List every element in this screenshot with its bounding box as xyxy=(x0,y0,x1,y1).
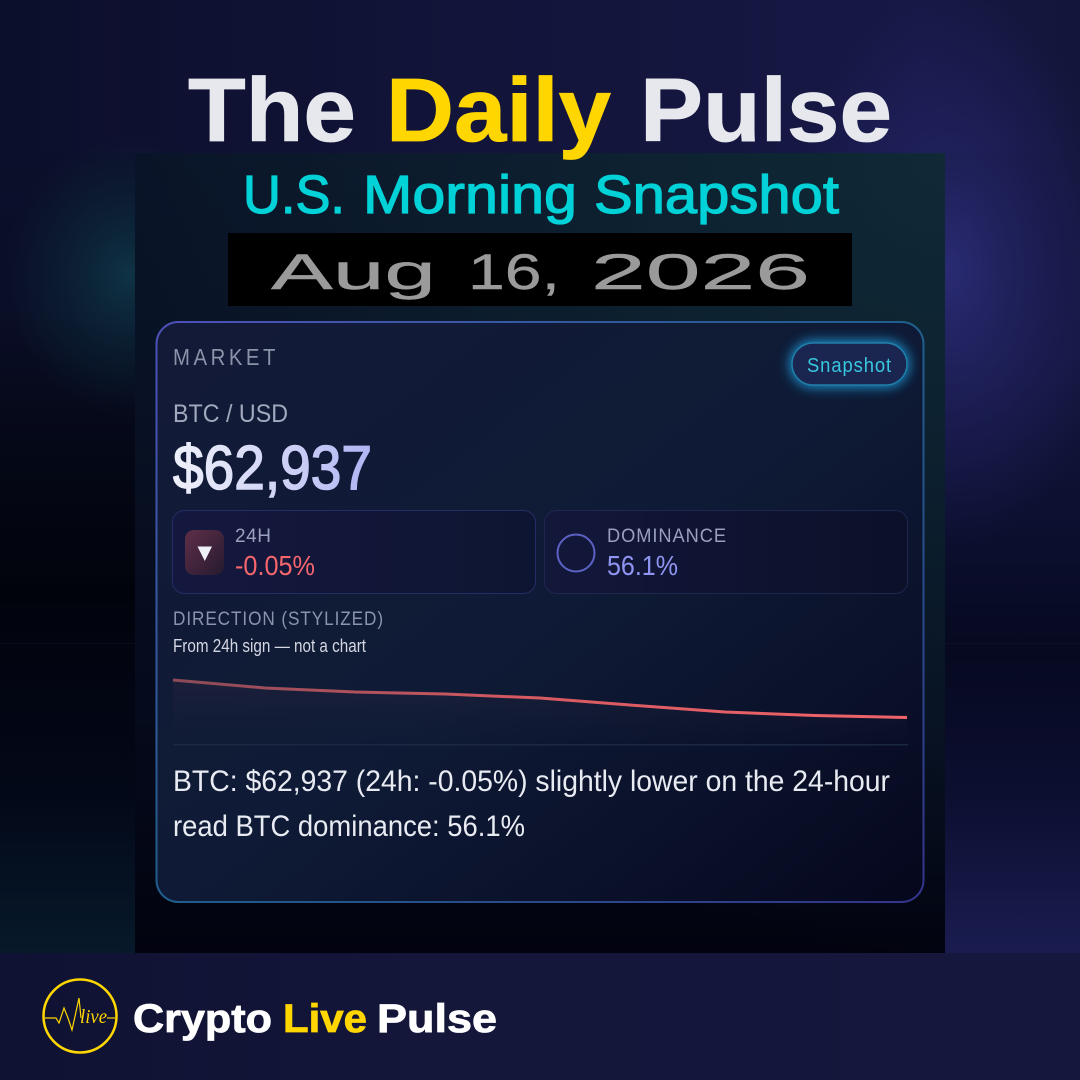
inner panel xyxy=(135,153,945,953)
snapshot badge: Snapshot xyxy=(807,355,892,377)
logo: crypto live pulse xyxy=(44,980,497,1052)
panel: 24h stat xyxy=(172,510,536,594)
footer band xyxy=(0,953,1080,1080)
summary text: read BTC dominance: 56.1% xyxy=(173,810,525,843)
wordmark: Crypto xyxy=(133,997,272,1041)
24h label: 24H xyxy=(235,526,271,547)
direction note: From 24h sign — not a chart xyxy=(173,636,366,656)
date banner: Aug xyxy=(271,244,436,300)
summary text xyxy=(173,765,890,843)
title: Pulse xyxy=(640,61,892,161)
dominance value: 56.1% xyxy=(607,550,678,581)
snapshot badge xyxy=(790,341,909,387)
date banner: 16, xyxy=(468,244,560,300)
summary text: BTC: $62,937 (24h: -0.05%) slightly lower on the 24-hour xyxy=(173,765,890,798)
24h value: -0.05% xyxy=(235,550,315,581)
icon: down triangle xyxy=(185,530,224,575)
direction label: DIRECTION (STYLIZED) xyxy=(173,609,384,630)
icon: pulse circle xyxy=(44,980,116,1052)
date banner: 2026 xyxy=(591,244,810,300)
wordmark xyxy=(133,997,497,1041)
subtitle: Morning xyxy=(363,165,577,225)
subtitle: U.S. xyxy=(243,165,345,225)
title: The xyxy=(188,61,356,161)
title: Daily xyxy=(386,61,611,161)
icon: ring xyxy=(558,534,594,572)
panel: dominance stat xyxy=(544,510,908,594)
subtitle xyxy=(243,165,839,225)
chart: direction line xyxy=(173,680,907,745)
title xyxy=(188,61,892,161)
pair label: BTC / USD xyxy=(173,400,288,428)
market label: MARKET xyxy=(173,344,279,370)
icon: pulse circle: live xyxy=(80,1006,107,1028)
price: $62,937 xyxy=(173,434,372,503)
panel: market card xyxy=(156,322,924,902)
dominance label: DOMINANCE xyxy=(607,526,727,547)
subtitle: Snapshot xyxy=(594,165,839,225)
wordmark: Live xyxy=(283,997,367,1041)
wordmark: Pulse xyxy=(377,997,497,1041)
date banner xyxy=(228,233,852,306)
